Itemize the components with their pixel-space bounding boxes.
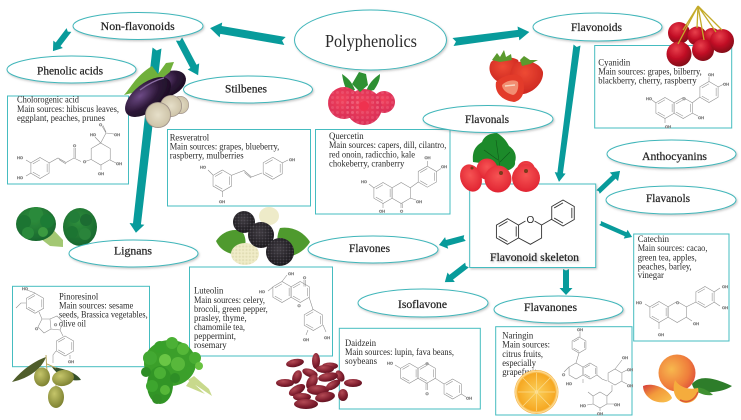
chemical structure: flavonoid skeleton [496,200,574,244]
icon: olives [12,355,81,408]
chemical structure: naringin: HO [580,403,586,408]
text: chlorogenic acid sources: Cholorogenic acid [17,95,79,105]
text: daidzein sources [345,338,454,366]
chemical structure: chlorogenic acid: OH [116,161,122,166]
text: skeleton oxygen: O [526,215,534,226]
text: chlorogenic acid sources: Main sources: hibiscus leaves, [17,104,119,114]
chemical structure: resveratrol: OH [289,157,295,162]
text: Flavonoid skeleton label: Flavonoid skeleton [490,252,579,264]
chemical structure: quercetin: OH [416,199,422,204]
chemical structure: catechin: OH [722,305,728,310]
chemical structure: chlorogenic acid: O [99,122,102,127]
arrow: Non-flavonoids to Lignans [128,47,164,234]
chemical structure: pinoresinol [16,286,74,364]
chemical structure: resveratrol: HO [200,164,206,170]
panel: pinoresinol [12,286,150,367]
text: catechin sources: vinegar [638,270,664,280]
text: catechin sources [638,234,707,280]
panel: resveratrol [168,130,310,206]
icon: broccoli [16,207,97,247]
chemical structure: catechin: OH [693,321,699,326]
text: chlorogenic acid sources [17,95,119,123]
chemical structure: luteolin: HO [259,289,265,294]
panel: chlorogenic acid [8,95,128,184]
arrow: Non-flavonoids to Phenolic acids [48,26,74,55]
icon: raspberries [328,72,395,125]
text: cyanidin sources [598,57,702,86]
text: daidzein sources: soybeans [345,356,377,366]
text: pinoresinol sources: Main sources: sesame [59,300,133,310]
text: naringin sources: especially [502,358,536,368]
chemical structure: quercetin: OH [441,164,447,169]
chemical structure: luteolin: O [303,275,306,280]
chemical structure: quercetin: OH [424,155,431,160]
chemical structure: quercetin: O [400,208,403,214]
text: catechin sources: green tea, apples, [638,252,697,262]
panel: daidzein [339,328,480,409]
text: pinoresinol sources: Pinoresinol [59,291,99,301]
chemical structure: catechin: O [676,300,679,305]
chemical structure: daidzein: OH [466,396,472,400]
arrow: skeleton to Anthocyanins [594,167,624,196]
text: quercetin sources: Quercetin [329,131,364,141]
text: cyanidin sources: blackberry, cherry, raspberry [598,76,697,86]
node: Stilbenes [184,76,312,103]
text: luteolin sources: peppermint, [194,331,236,341]
chemical structure: luteolin: OH [324,335,330,340]
node: Isoflavone [358,289,488,317]
text: chlorogenic acid sources: eggplant, peaches, prunes [17,113,105,123]
node: Flavonals: Flavonals [465,114,510,126]
text: daidzein sources: Daidzein [345,338,376,348]
node: Flavanones: Flavanones [524,302,578,314]
text: resveratrol sources [170,132,279,161]
chemical structure: chlorogenic acid [17,122,122,180]
text: luteolin sources [194,286,268,350]
icon: peach [643,354,732,403]
text: resveratrol sources: raspberry, mulberries [170,151,244,161]
icon: strawberries [489,50,543,102]
node: Polyphenolics: Polyphenolics [325,31,417,51]
chemical structure: quercetin: HO [361,179,367,184]
text: quercetin sources: chokeberry, cranberry [329,158,405,168]
text: cyanidin sources: Main sources: grapes, bilberry, [598,66,702,76]
chemical structure: daidzein: O [426,361,429,366]
text: luteolin sources: brocoli, green pepper, [194,304,268,314]
text: daidzein sources: Main sources: lupin, fava beans, [345,347,454,357]
chemical structure: luteolin: O [298,303,301,308]
icon: red currants [456,133,540,195]
arrow: skeleton to Catechin [598,219,634,241]
chemical structure: resveratrol: OH [219,199,225,204]
text: pinoresinol sources: olive oil [59,319,86,329]
panel: luteolin [190,267,332,356]
chemical structure: cyanidin: OH [665,124,671,129]
panel: catechin [634,234,729,341]
node: Lignans [69,240,198,267]
chemical structure: resveratrol [200,157,295,204]
chemical structure: chlorogenic acid: OH [98,171,104,176]
chemical structure: catechin: OH [658,332,664,337]
text: pinoresinol sources: seeds, Brassica vegetables, [59,310,148,320]
text: resveratrol sources: Resveratrol [170,132,210,142]
text: quercetin sources: Main sources: capers, dill, cilantro, [329,140,446,150]
arrow: Polyphenolics to Flavonoids [452,25,530,49]
chemical structure: daidzein [387,360,472,400]
chemical structure: luteolin: OH [288,271,294,276]
text: catechin sources: Main sources: cacao, [638,243,707,253]
arrow: skeleton to Flavones [437,232,467,251]
text: quercetin sources: red onoin, radicchio, kale [329,150,415,160]
chemical structure: catechin [636,284,728,337]
node: Phenolic acids [7,56,136,83]
text: luteolin sources: Main sources: celery, [194,295,265,305]
node: Anthocyanins [607,140,736,168]
chemical structure: daidzein: O [426,391,429,396]
arrow: skeleton to Isoflavone [441,260,471,287]
chemical structure: naringin: OH [627,383,633,388]
text: naringin sources: Naringin [502,331,534,341]
chemical structure: chlorogenic acid: OH [114,132,120,137]
chemical structure: pinoresinol: OH [68,359,74,364]
chemical structure: daidzein: HO [387,360,393,366]
arrow: Non-flavonoids to Stilbenes [173,36,204,78]
chemical structure: naringin: OH [614,402,620,407]
text: quercetin sources [329,131,446,168]
chemical structure: quercetin: OH [379,208,385,214]
panel: quercetin [316,130,450,214]
node: Flavonoids [533,13,662,41]
chemical structure: pinoresinol: O [54,322,57,327]
node: Phenolic acids: Phenolic acids [37,66,104,78]
chemical structure: quercetin [361,155,447,214]
chemical structure: luteolin: OH [303,337,309,342]
panel: flavonoid skeleton [470,184,596,268]
text: pinoresinol sources [59,291,148,329]
icon: kidney beans [276,353,362,409]
text: catechin sources: peaches, barley, [638,262,692,272]
node: Anthocyanins: Anthocyanins [642,151,708,163]
chemical structure: chlorogenic acid: HO [17,155,23,160]
text: luteolin sources: Luteolin [194,286,224,296]
chemical structure: cyanidin [646,72,729,129]
chemical structure: cyanidin: OH [723,82,729,86]
chemical structure: chlorogenic acid: O [83,159,86,164]
chemical structure: chlorogenic acid: O [73,143,76,148]
chemical structure: naringin: HO [566,381,572,386]
chemical structure: cyanidin: OH [698,115,704,120]
node: Flavanols: Flavanols [646,193,691,205]
panel: cyanidin [595,46,732,129]
icon: cherries [666,6,734,66]
node: Stilbenes: Stilbenes [225,84,268,96]
chemical structure: pinoresinol: O [35,326,38,331]
text: cyanidin sources: Cyanidin [598,57,631,67]
chemical structure: cyanidin: O [682,96,686,101]
node: Flavones: Flavones [349,243,391,255]
node: Flavanols [606,186,736,214]
text: luteolin sources: chamomile tea, [194,322,245,332]
text: naringin sources: citrus fruits, [502,349,543,359]
node: Flavonoids: Flavonoids [571,22,623,34]
text: naringin sources: grapefruit [502,367,537,377]
chemical structure: catechin: OH [722,284,728,289]
node: Lignans: Lignans [114,246,153,258]
chemical structure: naringin: OH [577,327,583,332]
text: naringin sources [502,331,550,377]
node: Non-flavonoids [73,12,203,40]
node: Flavanones [494,296,623,323]
node: Flavones [308,236,438,263]
arrow: skeleton to Flavanones [560,269,572,295]
chemical structure: pinoresinol: HO [22,286,28,291]
icon: eggplant [118,62,190,128]
chemical structure: catechin: HO [636,300,642,305]
icon: parsley [141,337,212,404]
text: luteolin sources: rosemary [194,340,227,350]
text: resveratrol sources: Main sources: grapes, blueberry, [170,142,279,152]
node: Flavonals [423,106,553,132]
arrow: Polyphenolics to Non-flavonoids [209,21,286,48]
chemical structure: chlorogenic acid: HO [17,175,23,180]
chemical structure: luteolin [259,271,330,342]
node: Polyphenolics [294,10,446,70]
chemical structure: naringin: OH [627,367,633,372]
chemical structure: naringin: OH [622,355,628,360]
chemical structure: cyanidin: OH [708,72,714,77]
icon: mulberries [216,207,310,266]
chemical structure: naringin: O [562,372,565,377]
panel: naringin [496,327,633,416]
chemical structure: naringin: OH [597,411,603,416]
arrow: Flavonoids to Flavonoid skeleton [554,44,582,183]
chemical structure: chlorogenic acid: HO [90,132,96,137]
text: luteolin sources: prasley, thyme, [194,313,247,323]
icon: orange slice [514,370,558,414]
node: Non-flavonoids: Non-flavonoids [101,21,175,33]
text: naringin sources: Main sources: [502,340,550,350]
node: Isoflavone: Isoflavone [398,299,447,311]
chemical structure: cyanidin: HO [646,96,652,101]
text: catechin sources: Catechin [638,234,669,244]
chemical structure: naringin [562,327,633,416]
